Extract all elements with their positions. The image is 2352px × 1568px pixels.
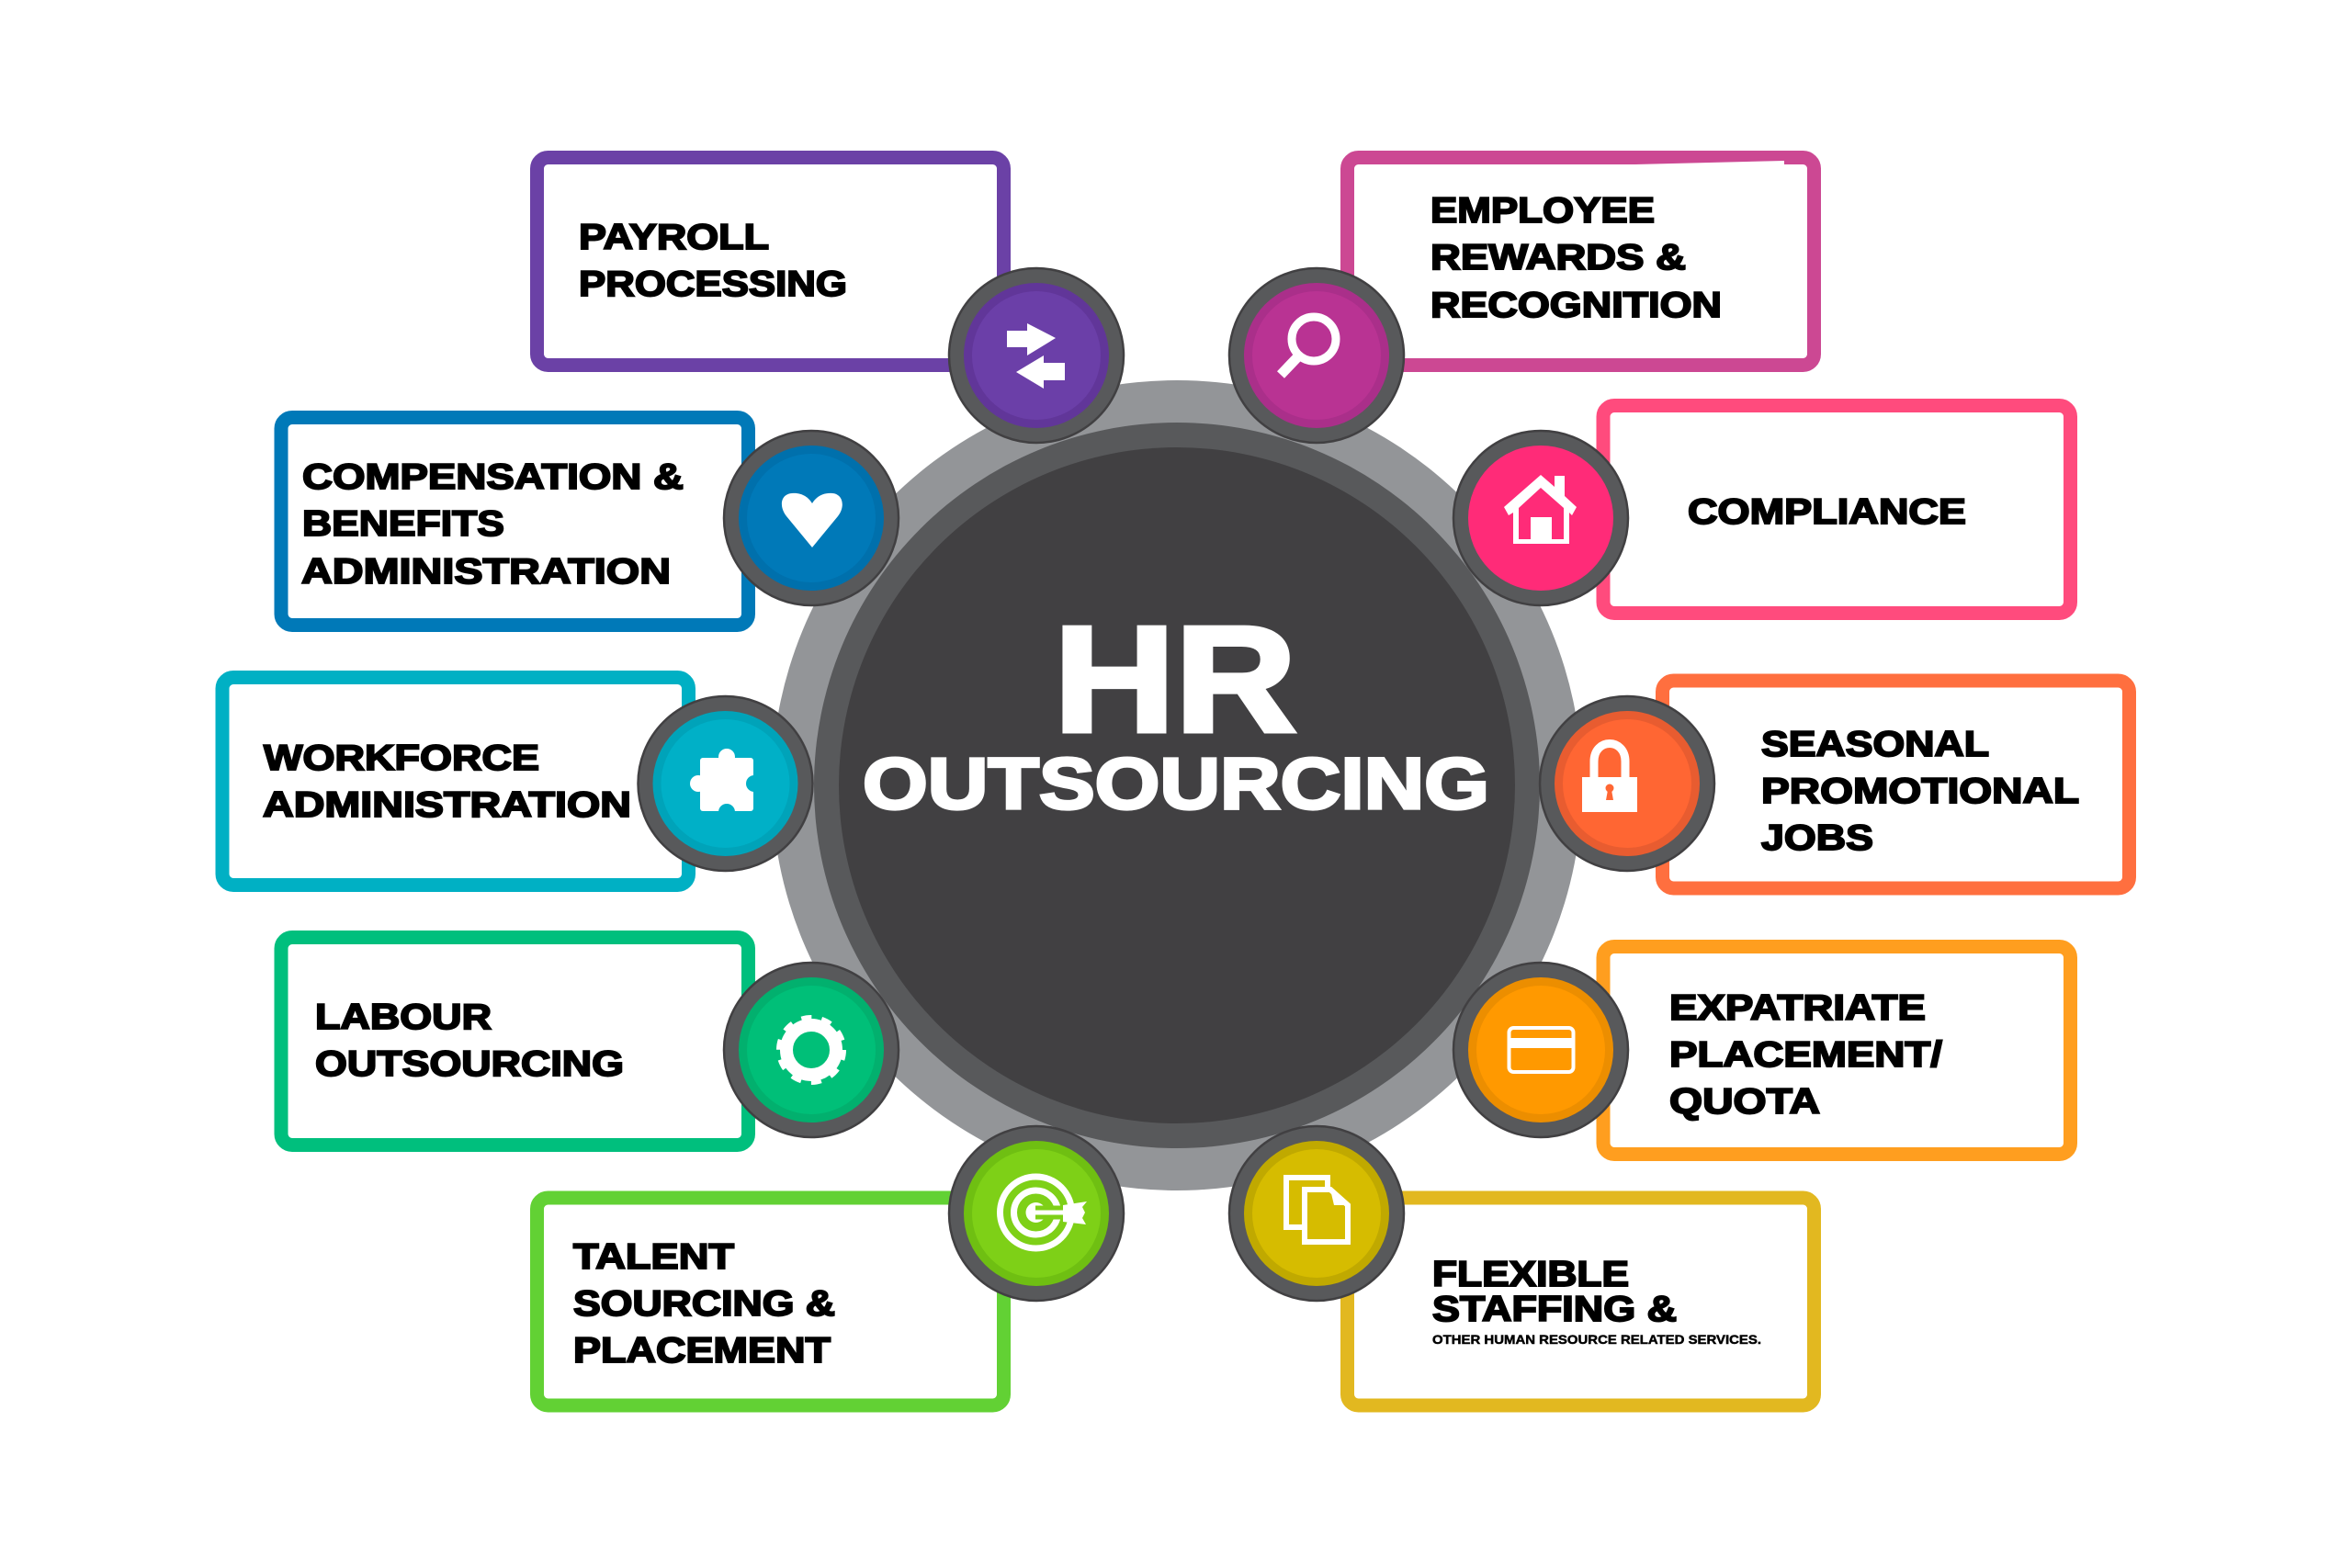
icon badge: exchange arrows [949,268,1124,443]
panel: talent sourcing and placement [537,1198,1003,1405]
panel: flexible staffing: OTHER HUMAN RESOURCE RELATED SERVICES. [1432,1332,1761,1347]
panel: flexible staffing: FLEXIBLE [1432,1255,1629,1294]
panel: workforce administration: ADMINISTRATION [263,785,631,825]
icon badge: gear [724,963,899,1137]
icon badge: documents [1229,1126,1404,1301]
panel: flexible staffing: STAFFING & [1432,1290,1677,1329]
icon badge: padlock [1540,696,1714,871]
panel: talent sourcing and placement: SOURCING & [573,1284,835,1324]
icon badge: credit card [1453,963,1628,1137]
icon badge: puzzle piece [638,696,812,871]
panel: compliance [1603,406,2071,614]
panel: compensation and benefits administration [281,417,748,625]
panel: compensation and benefits administration: BENEFITS [302,504,504,544]
title: HR Outsourcing: HR [1054,595,1296,763]
panel: workforce administration: WORKFORCE [264,739,539,778]
panel: expatriate placement quota: PLACEMENT/ [1669,1035,1942,1075]
panel: labour outsourcing: LABOUR [315,998,492,1037]
icon badge: house [1453,431,1628,605]
panel: compensation and benefits administration: ADMINISTRATION [301,552,671,592]
panel: employee rewards and recognition [1347,158,1814,366]
panel: compensation and benefits administration: COMPENSATION & [302,457,684,497]
panel: expatriate placement quota: EXPATRIATE [1669,988,1926,1028]
panel: expatriate placement quota [1603,946,2071,1154]
title: HR Outsourcing [863,595,1489,824]
panel: payroll processing [537,158,1003,366]
panel: seasonal promotional jobs [1663,681,2130,888]
panel: expatriate placement quota: QUOTA [1669,1082,1820,1122]
icon badge: magnifying glass [1229,268,1404,443]
title: HR Outsourcing: OUTSOURCING [863,742,1489,824]
panel: employee rewards and recognition: REWARDS & [1430,238,1686,277]
panel: seasonal promotional jobs: PROMOTIONAL [1761,772,2079,811]
panel: compliance: COMPLIANCE [1688,492,1966,532]
icon badge: heart [724,431,899,605]
panel: employee rewards and recognition: RECOGNITION [1430,286,1722,325]
panel: payroll processing: PAYROLL [579,218,769,257]
panel: employee rewards and recognition: EMPLOYEE [1430,191,1655,231]
panel: flexible staffing [1347,1198,1814,1405]
panel: payroll processing: PROCESSING [579,265,847,304]
panel: labour outsourcing [281,937,748,1145]
icon badge: target [949,1126,1124,1301]
panel: workforce administration [222,678,689,886]
central hub circle [772,380,1582,1190]
panel: seasonal promotional jobs: SEASONAL [1761,725,1989,764]
panel: talent sourcing and placement: TALENT [573,1237,735,1277]
panel: talent sourcing and placement: PLACEMENT [573,1331,831,1371]
panel: seasonal promotional jobs: JOBS [1761,818,1873,858]
panel: labour outsourcing: OUTSOURCING [315,1044,624,1084]
